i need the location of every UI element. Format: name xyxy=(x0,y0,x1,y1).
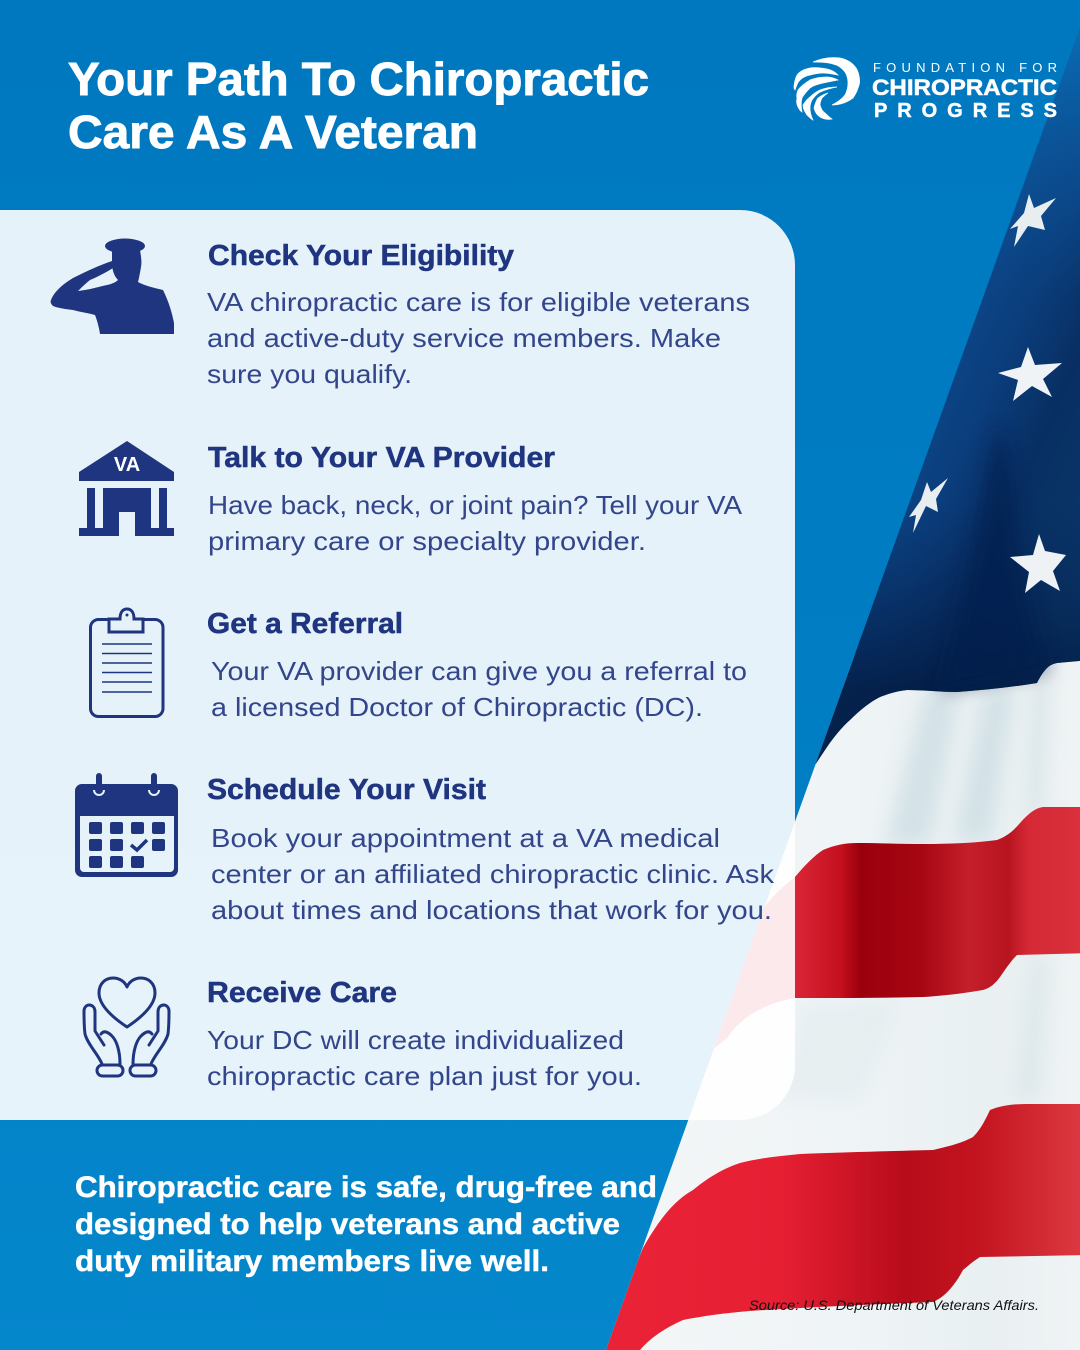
flag: dark fold xyxy=(940,427,1050,690)
icon: VA building xyxy=(79,441,174,536)
flag: star 1 xyxy=(1010,194,1056,247)
step 3: referral xyxy=(90,608,747,722)
closing statement: Chiropractic care is safe, drug-free and xyxy=(75,1171,657,1204)
logo: wordmark: FOUNDATION FOR xyxy=(873,60,1057,75)
closing statement xyxy=(75,1171,657,1278)
icon: logo swirl xyxy=(794,58,860,120)
flag: star 2 xyxy=(998,347,1062,401)
flag: red stripe 2 xyxy=(600,1104,1080,1350)
body text xyxy=(207,287,750,389)
icon: VA building: VA xyxy=(114,454,140,476)
step 5: receive care xyxy=(84,977,642,1091)
flag: canton bottom shading xyxy=(816,543,1080,764)
logo: wordmark: CHIROPRACTIC xyxy=(872,75,1057,100)
body text: Book your appointment at a VA medical xyxy=(211,823,720,853)
body text: Have back, neck, or joint pain? Tell your VA xyxy=(208,490,743,520)
flag: star 4 xyxy=(1010,534,1066,593)
body text: chiropractic care plan just for you. xyxy=(207,1061,642,1091)
body text: primary care or specialty provider. xyxy=(208,526,646,556)
title xyxy=(68,53,649,158)
step 4: schedule xyxy=(75,774,775,925)
heading: Check Your Eligibility xyxy=(208,240,514,272)
icon: saluting soldier xyxy=(51,238,174,334)
closing statement: designed to help veterans and active xyxy=(75,1208,620,1241)
body text: VA chiropractic care is for eligible veterans xyxy=(207,287,750,317)
heading: Receive Care xyxy=(207,977,397,1009)
closing statement: duty military members live well. xyxy=(75,1245,549,1278)
heading: Get a Referral xyxy=(207,608,403,640)
step 1: eligibility xyxy=(51,238,750,389)
title: Your Path To Chiropractic xyxy=(68,53,649,105)
body text: center or an affiliated chiropractic clinic. Ask xyxy=(211,859,775,889)
body text xyxy=(208,490,743,556)
source note: Source: U.S. Department of Veterans Affairs. xyxy=(749,1297,1039,1313)
body text: Your VA provider can give you a referral to xyxy=(211,656,747,686)
step 2: VA provider xyxy=(79,441,743,556)
american flag xyxy=(600,0,1080,1350)
heading: Schedule Your Visit xyxy=(207,774,486,806)
body text: Your DC will create individualized xyxy=(207,1025,624,1055)
panel: steps xyxy=(0,210,795,1120)
body text xyxy=(207,1025,642,1091)
flag: white stripe folds xyxy=(780,668,1050,1100)
flag: star 3 xyxy=(909,478,948,533)
flag: white base xyxy=(600,655,1080,1350)
flag: canton top fade xyxy=(1006,28,1080,238)
flag: blue canton xyxy=(815,0,1080,765)
body text: and active-duty service members. Make xyxy=(207,323,721,353)
logo xyxy=(794,58,1057,122)
icon: hands holding heart xyxy=(84,978,169,1076)
body text: about times and locations that work for you. xyxy=(211,895,772,925)
flag: red stripe 1 xyxy=(700,807,1080,1060)
logo: wordmark xyxy=(872,60,1057,122)
logo: wordmark: PROGRESS xyxy=(874,100,1057,122)
body text: sure you qualify. xyxy=(207,359,412,389)
body text xyxy=(211,656,747,722)
icon: calendar xyxy=(75,776,178,877)
body text xyxy=(211,823,775,925)
heading: Talk to Your VA Provider xyxy=(208,442,555,474)
title: Care As A Veteran xyxy=(68,106,478,158)
icon: clipboard xyxy=(90,609,163,716)
body text: a licensed Doctor of Chiropractic (DC). xyxy=(211,692,703,722)
